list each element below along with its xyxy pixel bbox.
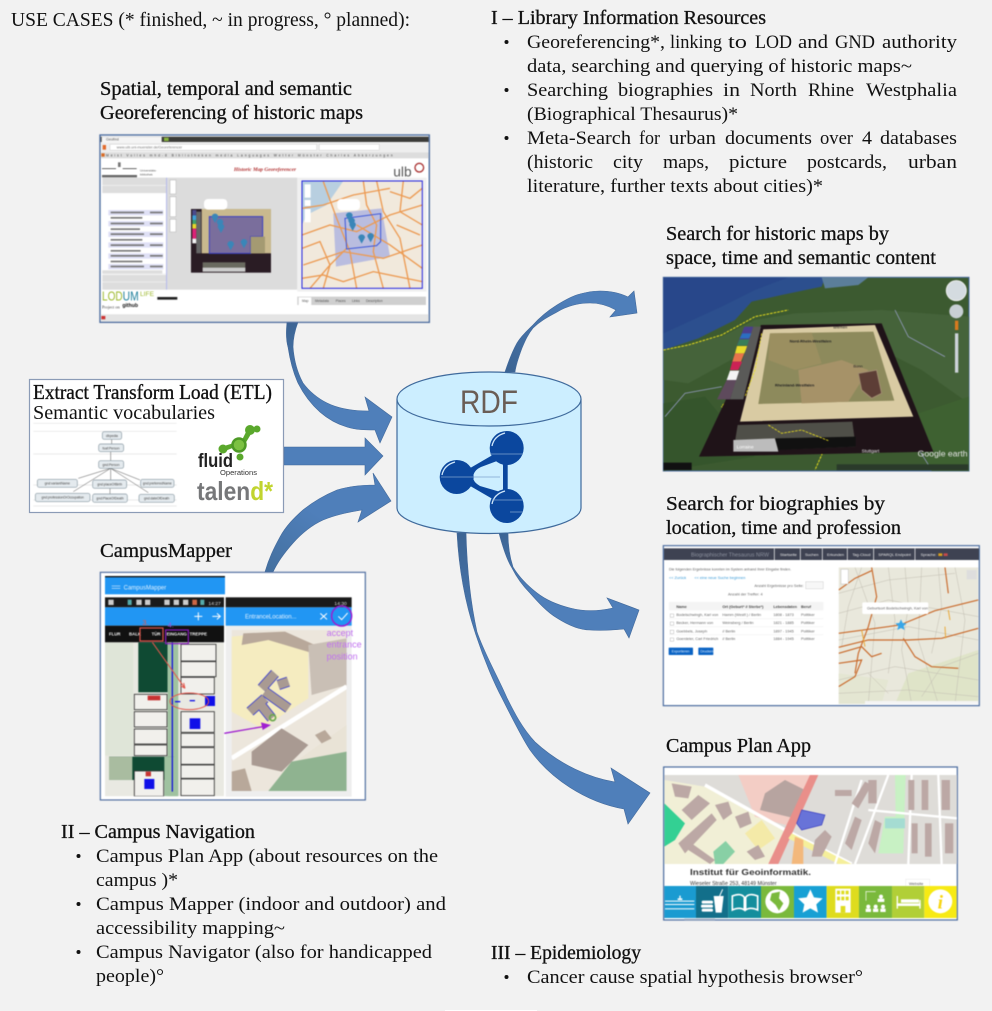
icon: lecture <box>866 891 886 912</box>
navigation bar: Biographischer Thesaurus NRW <box>691 553 770 559</box>
section: II Campus Navigation: people)° <box>96 966 164 987</box>
vocabulary diagram: gnd:preferredName <box>143 482 172 486</box>
navigation bar <box>664 548 979 560</box>
results table: Lebensdaten <box>773 605 798 609</box>
logo: fluid Operations: fluid <box>198 451 233 472</box>
phone: floor plan: TÜR <box>152 632 161 637</box>
panel: historic map georeferencer screenshot <box>100 135 429 322</box>
panel: Google Earth map screenshot <box>663 277 969 471</box>
arrow: RDF to campus plan app <box>457 533 650 824</box>
vocabulary diagram: foaf:Person <box>102 446 120 450</box>
ulb header: Universitäts- <box>140 169 157 173</box>
ulb header <box>102 162 424 180</box>
LODUM logo: LIFE <box>140 291 155 298</box>
heading: ETL: Extract Transform Load (ETL) <box>33 380 272 404</box>
section: I Library Information Resources: Searching <box>527 80 609 101</box>
logo: fluid Operations: Operations <box>220 468 257 477</box>
results table: Beruf <box>801 605 812 609</box>
results table: Weinsberg / Berlin <box>722 621 754 625</box>
section: II Campus Navigation: campus )* <box>96 870 178 891</box>
icon: info <box>928 889 952 914</box>
section: I Library Information Resources: 4 <box>862 128 873 149</box>
section: I Library Information Resources: (historic <box>527 152 593 173</box>
section: I Library Information Resources: North <box>750 80 798 101</box>
vocabulary diagram: gnd:Person <box>102 463 120 467</box>
panel: Google Earth map screenshot: Bonn <box>853 363 863 368</box>
annotation: accept entrance position: position <box>327 652 358 662</box>
icon: pool <box>665 896 694 909</box>
results table: Goerdeler, Carl Friedrich <box>676 637 718 641</box>
section: III Epidemiology <box>491 943 863 988</box>
phone: floor plan <box>105 597 224 796</box>
heading: spatial georeferencing: Georeferencing of historic maps <box>100 103 363 124</box>
buttons <box>669 648 713 655</box>
vocabulary diagram: gnd:PlaceOfDeath <box>96 496 124 500</box>
arrow: RDF to historic map search <box>505 291 637 372</box>
section: II Campus Navigation: Campus Navigator (also for handicapped <box>96 942 433 963</box>
annotation: accept entrance position: accept <box>327 628 354 638</box>
results table: Bodelschwingh, Karl von <box>676 613 718 617</box>
campus map <box>664 775 957 864</box>
section: III Epidemiology: Cancer cause spatial hypothesis browser° <box>527 967 863 988</box>
section: I Library Information Resources: biographies <box>618 80 713 101</box>
results table: // Berlin <box>722 629 735 633</box>
ulb header: Historic Map Georeferencer <box>233 167 297 173</box>
app title bar: CampusMapper <box>124 586 166 592</box>
results table: << eine neue Suche beginnen <box>694 576 745 580</box>
section: I Library Information Resources: GND <box>835 32 875 53</box>
panel: Google Earth map screenshot: Bremen <box>833 325 847 330</box>
panel: Google Earth map screenshot: Nord-Rhein-Westfalen <box>790 339 832 344</box>
section: I Library Information Resources: databases <box>880 128 957 149</box>
icon tiles <box>664 886 957 918</box>
panel: historic map georeferencer screenshot: www.ulb.uni-muenster.de/Georeferencer <box>117 146 183 150</box>
map with star: Geburtsort Bodelschwingh, Karl von <box>867 606 928 610</box>
arrow: CampusMapper to RDF <box>265 473 391 572</box>
results table: 1897 - 1945 <box>773 629 794 633</box>
icon: RDF network <box>440 431 524 523</box>
heading: spatial georeferencing: Spatial, temporal and semantic <box>100 79 352 100</box>
address text: Wieseler Straße 253, 48149 Münster <box>690 881 777 887</box>
section: II Campus Navigation: Campus Mapper (indoor and outdoor) and <box>96 894 447 915</box>
heading: search biographies: location, time and profession <box>666 518 901 539</box>
results table: Ort (Geburt* // Sterbe*) <box>722 605 764 609</box>
section: II Campus Navigation: II – Campus Navigation <box>61 822 255 843</box>
heading: search historic maps <box>666 224 937 269</box>
results table: Name <box>676 605 687 609</box>
heading: search biographies: Search for biographies by <box>666 494 885 515</box>
panel: Campus Plan App screenshot <box>664 767 957 920</box>
tabs: Links <box>352 299 360 303</box>
phone: floor plan: 4. <box>168 621 174 630</box>
heading: search biographies <box>666 494 901 539</box>
vocabulary diagram: gnd:professionOrOccupation <box>41 496 84 500</box>
label: RDF: RDF <box>460 384 518 420</box>
LODUM logo: UM <box>123 290 139 304</box>
buttons: Drucken <box>700 650 713 654</box>
app title bar <box>105 576 225 594</box>
phone: floor plan: 14:27 <box>208 601 221 607</box>
vocabulary diagram: dbpedia <box>106 434 118 438</box>
results table: Politiker <box>801 637 815 641</box>
section: II Campus Navigation: Campus Plan App (about resources on the <box>96 846 438 867</box>
LODUM logo: Project on <box>102 305 121 310</box>
section: I Library Information Resources: and <box>798 32 829 53</box>
icon: food <box>701 889 724 913</box>
ulb header: bibliothek <box>140 173 153 177</box>
navigation bar: SPARQL Endpoint <box>878 552 912 557</box>
section: I Library Information Resources: I – Library Information Resources <box>491 8 766 29</box>
phone: floor plan: FLUR <box>109 632 121 637</box>
panel: historic map georeferencer screenshot: Meist Volles mhd-8 Bibliotheken media Languages Wetter Münster Charles Abkürzungen <box>106 154 393 158</box>
centre map viewer <box>167 178 297 290</box>
section: I Library Information Resources: to <box>728 32 747 53</box>
address text: Website <box>909 881 924 886</box>
phone: floor plan: BALK <box>129 632 142 637</box>
icon: globe <box>765 889 789 913</box>
section: III Epidemiology: III – Epidemiology <box>491 943 641 964</box>
section: I Library Information Resources <box>491 8 958 197</box>
section: I Library Information Resources: Westphalia <box>866 80 958 101</box>
arrow: RDF to biography search <box>499 533 639 638</box>
LODUM logo: LOD <box>102 290 123 304</box>
section: I Library Information Resources: city <box>613 152 644 173</box>
navigation bar: Suchen <box>805 552 819 557</box>
section: I Library Information Resources: LOD <box>755 32 792 53</box>
ulb header: ulb <box>393 164 412 180</box>
section: II Campus Navigation <box>61 822 447 987</box>
address text <box>690 867 930 887</box>
icon: bed <box>897 896 921 909</box>
panel: ETL box <box>30 380 284 512</box>
panel: historic map georeferencer screenshot: Geofind <box>106 138 119 142</box>
section: I Library Information Resources: for <box>639 128 661 149</box>
section: I Library Information Resources: Meta-Search <box>527 128 632 149</box>
heading: search historic maps: Search for historic maps by <box>666 224 889 245</box>
section: I Library Information Resources: maps, <box>663 152 709 173</box>
panel: Google Earth map screenshot: Rheinland-Westfalen <box>775 383 815 388</box>
tabs: Map <box>302 299 309 303</box>
vocabulary diagram <box>33 423 177 506</box>
results table: Anzahl der Treffer: 4 <box>728 592 763 596</box>
tabs <box>297 297 426 305</box>
results table: Becker, Hermann von <box>676 621 713 625</box>
panel: Biographical Thesaurus screenshot <box>663 546 979 706</box>
results table: 1884 - 1945 <box>773 637 794 641</box>
phone: entrance location: 14:30 <box>334 601 347 607</box>
right overview map <box>297 178 427 292</box>
annotation: accept entrance position: entrance <box>327 640 362 650</box>
phone: floor plan: 3. <box>142 618 148 627</box>
section: I Library Information Resources: (Biographical Thesaurus)* <box>527 104 738 125</box>
map with star <box>839 567 978 704</box>
section: II Campus Navigation: accessibility mapping~ <box>96 918 285 939</box>
subheading: semantic vocabularies: Semantic vocabularies <box>33 402 215 424</box>
section: I Library Information Resources: in <box>723 80 741 101</box>
section: I Library Information Resources: Georeferencing*, <box>527 32 665 53</box>
vocabulary diagram: gnd:placeOfBirth <box>97 482 122 486</box>
section: I Library Information Resources: postcards, <box>807 152 887 173</box>
icon: book <box>732 895 758 910</box>
phone: floor plan: TREPPE <box>190 632 207 637</box>
panel: Google Earth map screenshot: Lorraine <box>737 445 754 450</box>
buttons: Exportieren <box>672 650 690 654</box>
section: I Library Information Resources: urban <box>908 152 958 173</box>
phone: entrance location: EntranceLocation... <box>245 614 297 620</box>
tabs: Metadata <box>315 299 329 303</box>
LODUM logo: github <box>122 303 138 309</box>
LODUM logo <box>102 290 177 310</box>
heading: Campus Plan App: Campus Plan App <box>666 736 811 757</box>
vocabulary diagram: gnd:variantName <box>45 482 70 486</box>
logo: talend: talend* <box>197 476 274 506</box>
heading: CampusMapper: CampusMapper <box>100 541 233 562</box>
navigation bar: Startseite <box>780 552 798 557</box>
navigation bar: Sprache: <box>921 552 937 557</box>
results table: 1808 - 1873 <box>773 613 794 617</box>
arrow: ETL to RDF <box>284 438 383 475</box>
section: I Library Information Resources: literature, further texts about cities)* <box>527 176 823 197</box>
results table: Goebbels, Joseph <box>676 629 707 633</box>
phone: entrance location <box>224 597 352 797</box>
panel: Google Earth map screenshot: Google earth <box>918 450 968 459</box>
section: I Library Information Resources: data, searching and querying of historic maps~ <box>527 56 912 77</box>
results table: Hamm (Westf.) / Berlin <box>722 613 761 617</box>
heading: search historic maps: space, time and semantic content <box>666 248 937 269</box>
results table: // Berlin <box>722 637 735 641</box>
section: I Library Information Resources: picture <box>729 152 787 173</box>
section: I Library Information Resources: Rhine <box>808 80 854 101</box>
results table: Die folgenden Ergebnisse konnten im System anhand Ihrer Eingabe finden. <box>669 568 791 572</box>
annotation: accept entrance position <box>327 606 362 662</box>
results table: Politiker <box>801 621 815 625</box>
icon: info: i <box>938 893 944 914</box>
results table <box>669 568 823 641</box>
section: I Library Information Resources: urban <box>669 128 717 149</box>
section: I Library Information Resources: over <box>820 128 854 149</box>
left panel <box>102 178 167 290</box>
arrow: georeferencer to RDF <box>286 322 392 443</box>
section: I Library Information Resources: authority <box>882 32 958 53</box>
heading: spatial georeferencing <box>100 79 363 124</box>
vocabulary diagram: gnd:dateOfDeath <box>144 497 169 501</box>
navigation bar: Tag-Cloud <box>852 552 870 557</box>
results table: 1821 - 1885 <box>773 621 794 625</box>
panel: CampusMapper screenshot <box>100 572 365 800</box>
section: I Library Information Resources: linking <box>670 32 722 53</box>
icon: star <box>798 889 823 913</box>
RDF database cylinder <box>397 372 581 534</box>
results table: Politiker <box>801 629 815 633</box>
title: USE CASES (* finished, ~ in progress, ° planned): <box>11 10 410 31</box>
phone: floor plan: EINGANG <box>167 632 187 637</box>
icon: building <box>835 889 851 913</box>
section: I Library Information Resources: documents <box>725 128 812 149</box>
logo: fluid Operations <box>198 425 260 477</box>
address text: Institut für Geoinformatik. <box>690 867 811 877</box>
tabs: Description <box>366 299 383 303</box>
tabs: Places <box>336 299 346 303</box>
panel: Google Earth map screenshot: Stuttgart <box>862 449 880 454</box>
navigation bar: Erkunden <box>827 552 844 557</box>
results table: Anzahl Ergebnisse pro Seite: <box>754 584 804 588</box>
results table: << Zurück <box>669 576 686 580</box>
results table: Politiker <box>801 613 815 617</box>
